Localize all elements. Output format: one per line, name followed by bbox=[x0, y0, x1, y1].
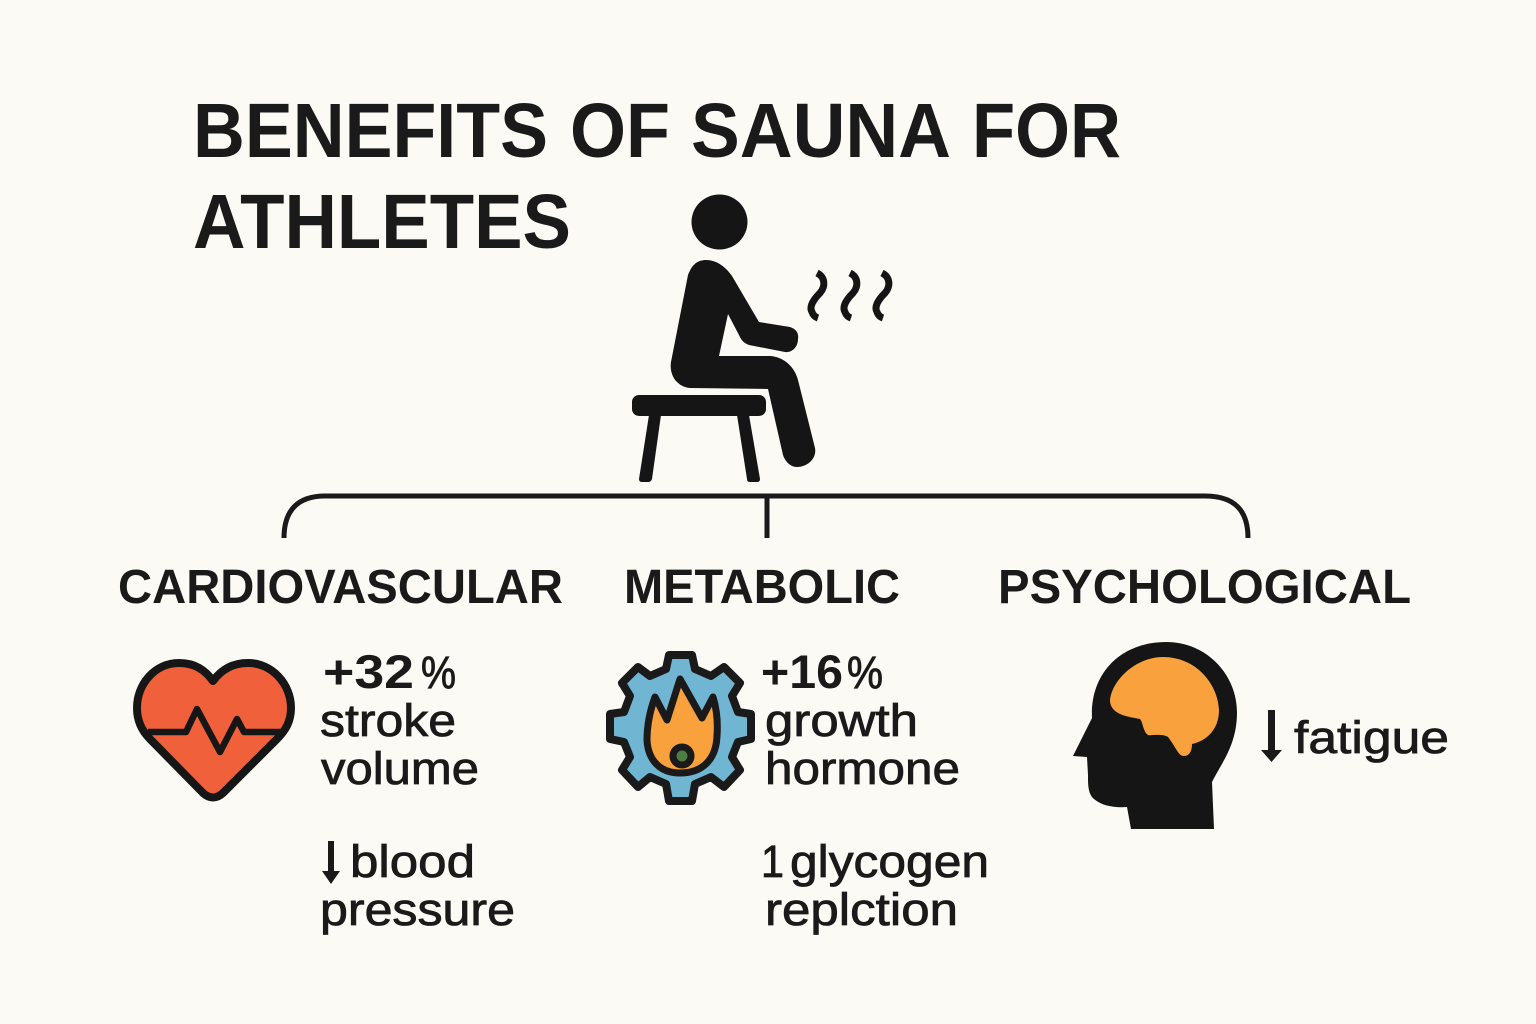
heading: metabolic: METABOLIC bbox=[624, 561, 900, 614]
text: blood pressure bbox=[320, 836, 515, 935]
icon: gear with flame bbox=[610, 655, 751, 801]
title: ATHLETES bbox=[193, 179, 571, 265]
heading: cardiovascular: CARDIOVASCULAR bbox=[118, 561, 563, 614]
text: glycogen repletion: 1 bbox=[761, 836, 784, 887]
text: growth hormone: hormone bbox=[765, 743, 960, 794]
icon: steam bbox=[811, 273, 889, 318]
text: glycogen repletion bbox=[761, 836, 989, 935]
text: stroke volume: % bbox=[421, 647, 456, 698]
text: growth hormone: +16 bbox=[761, 645, 843, 698]
text: blood pressure: pressure bbox=[320, 884, 515, 935]
text: growth hormone bbox=[761, 645, 960, 794]
text: fatigue bbox=[1261, 710, 1449, 763]
text: stroke volume: +32 bbox=[323, 645, 414, 698]
title: BENEFITS bbox=[193, 88, 548, 174]
icon: heart with pulse bbox=[137, 663, 291, 798]
text: stroke volume: volume bbox=[321, 743, 479, 794]
text: stroke volume bbox=[320, 645, 479, 794]
icon: seated person on stool bbox=[632, 194, 815, 482]
title bbox=[193, 88, 1121, 265]
text: blood pressure: blood bbox=[350, 836, 475, 887]
title: FOR bbox=[972, 88, 1121, 174]
icon: head with brain bbox=[1073, 642, 1237, 829]
text: glycogen repletion: replction bbox=[765, 884, 958, 935]
text: glycogen repletion: glycogen bbox=[790, 836, 989, 887]
text: fatigue: fatigue bbox=[1294, 712, 1449, 763]
bracket connector bbox=[284, 496, 1248, 538]
text: growth hormone: growth bbox=[765, 695, 918, 746]
text: stroke volume: stroke bbox=[320, 695, 456, 746]
title: OF bbox=[570, 88, 670, 174]
text: growth hormone: % bbox=[847, 647, 883, 698]
heading: psychological: PSYCHOLOGICAL bbox=[998, 561, 1411, 614]
title: SAUNA bbox=[691, 88, 951, 174]
